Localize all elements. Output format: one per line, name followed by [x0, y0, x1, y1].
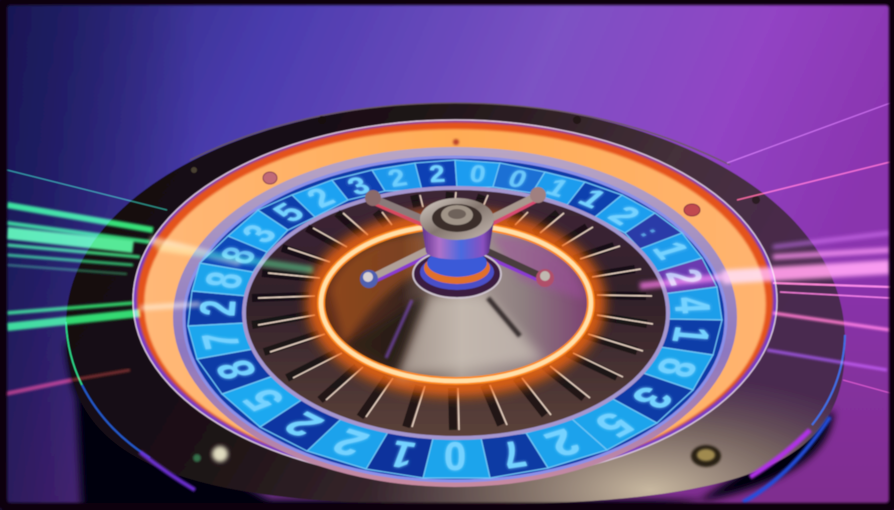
wheel numbers: 2 — [599, 201, 648, 231]
number ring base — [184, 157, 726, 481]
wheel numbers: 1 — [571, 183, 615, 213]
red notch on orange ring — [453, 139, 459, 145]
wheel numbers — [189, 160, 721, 478]
wheel numbers: 2 — [655, 266, 713, 289]
pink and violet light streaks — [640, 102, 893, 393]
centre cone — [320, 223, 592, 381]
spindle hub — [413, 198, 501, 298]
wheel numbers: 8 — [645, 354, 709, 382]
wheel numbers: 8 — [195, 269, 254, 292]
wheel: outer metal rim — [66, 103, 845, 505]
wheel numbers: 0 — [468, 160, 488, 188]
wheel numbers: 3 — [232, 219, 287, 248]
wheel numbers: 0 — [444, 434, 466, 478]
wheel numbers: 1 — [539, 174, 574, 203]
wheel numbers: 3 — [619, 380, 685, 415]
wheel numbers: 0 — [504, 164, 532, 193]
centre neon ring — [321, 225, 591, 381]
wheel numbers: 2 — [189, 299, 247, 317]
wheel numbers: 5 — [232, 382, 297, 417]
wheel numbers: 1 — [661, 325, 721, 345]
orange neon ring — [133, 120, 777, 482]
wheel numbers: : — [633, 224, 665, 241]
wheel numbers: 1 — [384, 432, 421, 476]
wheel numbers: 2 — [535, 421, 589, 463]
wheel numbers: 2 — [324, 421, 378, 463]
wheel numbers: 7 — [493, 432, 532, 476]
wheel numbers: 2 — [299, 182, 342, 213]
wheel numbers: 5 — [265, 198, 314, 228]
wheel numbers: 2 — [274, 405, 334, 444]
wheel numbers: 4 — [663, 296, 721, 314]
wheel numbers: 3 — [342, 172, 376, 201]
wheel numbers: 2 — [428, 160, 446, 188]
wheel numbers: 1 — [643, 237, 699, 264]
wheel numbers: 8 — [210, 243, 266, 268]
wheel shadow on the table — [66, 340, 834, 510]
green light streaks — [0, 170, 313, 395]
wheel numbers: 5 — [583, 405, 645, 444]
wheel numbers: 2 — [384, 163, 411, 192]
wheel edge reflections: green, blue and violet — [66, 322, 845, 502]
number ring segments — [188, 160, 722, 478]
silver-lilac track ring — [173, 147, 737, 487]
bolts on the rim and ring — [191, 116, 760, 467]
centre neon ring glow — [316, 219, 596, 387]
wheel numbers: 8 — [204, 356, 268, 384]
wheel numbers: 7 — [191, 330, 251, 352]
spindle arms — [360, 187, 554, 288]
inner pocket track with frets — [244, 188, 668, 438]
